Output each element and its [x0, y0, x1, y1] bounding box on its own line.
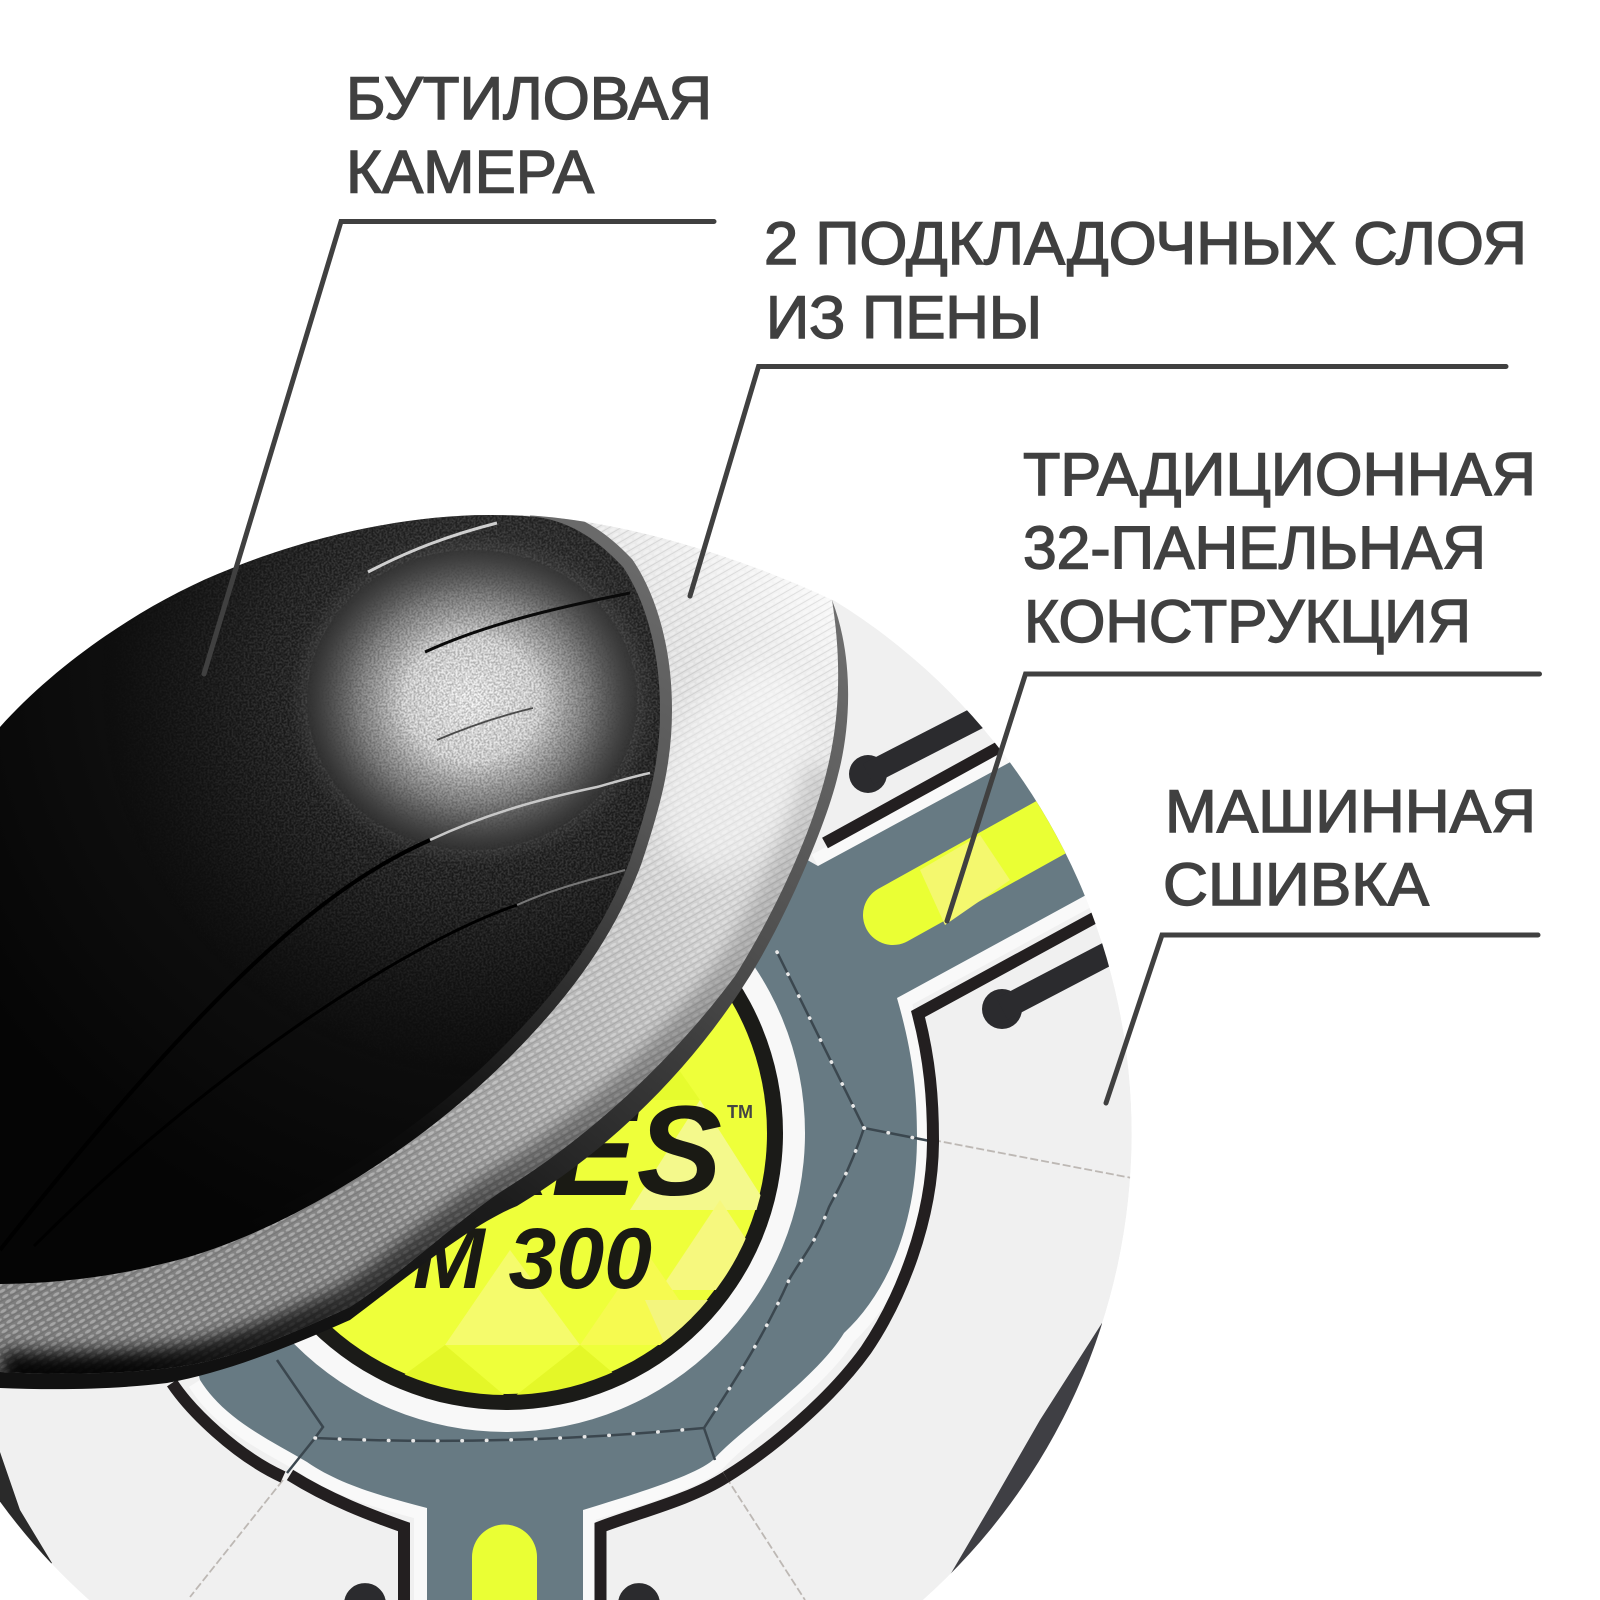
dark outer band of shell	[0, 600, 848, 1389]
label text: 32-ПАНЕЛЬНАЯ	[1023, 514, 1486, 582]
label text	[764, 210, 1527, 351]
label: butyl bladder	[204, 65, 714, 674]
inner grey edge band	[0, 516, 660, 1272]
white mask above shell	[0, 480, 840, 727]
label text: КАМЕРА	[346, 138, 594, 206]
stitched seams of central panel	[277, 952, 930, 1473]
bladder highlights and ridges	[150, 515, 660, 1102]
yellow triangle pattern	[404, 1070, 760, 1395]
label: foam layers	[690, 210, 1527, 596]
logo text	[414, 1105, 752, 1289]
label text: КОНСТРУКЦИЯ	[1024, 588, 1471, 655]
lighter segment on yellow bar	[920, 835, 1010, 925]
butyl bladder interior	[0, 515, 660, 1272]
label text: БУТИЛОВАЯ	[346, 65, 712, 132]
label text	[1023, 441, 1536, 655]
yellow bar on lower arm	[472, 1524, 537, 1600]
leader line	[690, 366, 1506, 596]
label text: МАШИННАЯ	[1165, 778, 1536, 845]
brand name: TORRES	[191, 1080, 722, 1223]
label text: ИЗ ПЕНЫ	[766, 284, 1042, 351]
sheen on rim	[653, 666, 816, 880]
yellow logo disc	[332, 1002, 767, 1394]
label text: ТРАДИЦИОННАЯ	[1023, 441, 1536, 508]
weave texture	[0, 505, 850, 1385]
ridge lines	[368, 523, 497, 572]
football	[0, 507, 1132, 1600]
leader line	[204, 222, 714, 674]
model name: M 300	[413, 1211, 652, 1307]
yellow bar on upper arm	[893, 800, 1100, 915]
trademark: TM	[727, 1102, 753, 1122]
label text	[1163, 778, 1536, 918]
white ring	[294, 968, 805, 1432]
foam lining rim	[0, 505, 850, 1385]
leader line	[947, 674, 1540, 921]
fine surface speckle	[159, 515, 660, 1021]
highlight grain	[307, 550, 637, 850]
glossy highlight	[298, 542, 646, 859]
cut-away shell of ball	[0, 480, 850, 1389]
black contour lines	[172, 745, 1105, 1600]
leader line	[1106, 935, 1538, 1103]
label: machine stitching	[1106, 778, 1538, 1103]
white ball surface	[0, 507, 1132, 1600]
panel seams	[190, 1140, 1132, 1600]
white band around grey panel	[200, 746, 1110, 1600]
black ring	[316, 988, 783, 1410]
label: 32-panel construction	[947, 441, 1540, 921]
grey central panel with arms	[183, 746, 1110, 1600]
dumbbell marks	[0, 714, 1130, 1600]
label text: 2 ПОДКЛАДОЧНЫХ СЛОЯ	[764, 210, 1527, 277]
label text: СШИВКА	[1163, 851, 1429, 918]
label text	[346, 65, 712, 206]
outer edge shading	[0, 770, 827, 1374]
